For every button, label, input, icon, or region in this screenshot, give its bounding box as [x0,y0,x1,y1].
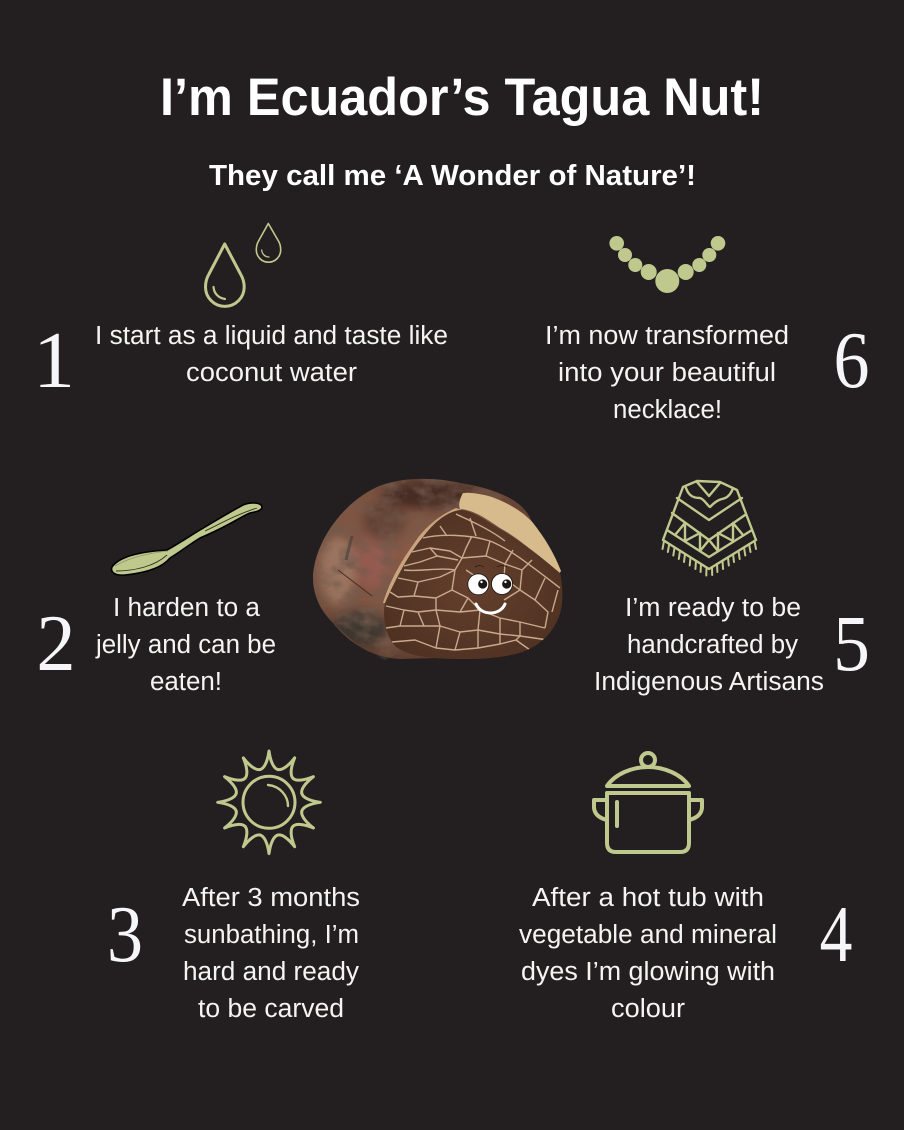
step 1 text [95,322,448,387]
step 3 text: sunbathing, I’m [184,921,359,949]
icon: necklace [609,236,725,293]
step 5 text: I’m ready to be [625,594,801,622]
step 2 text [95,594,276,696]
step 6 text: I’m now transformed [545,322,789,350]
step 6 text [545,322,789,424]
step 2 number: 2 [36,599,76,688]
step 3 text [182,884,360,1023]
step 4 text: colour [611,995,686,1023]
step 5 number: 5 [833,599,870,688]
icon: water drops [206,224,281,306]
step 6 text: necklace! [613,396,722,424]
step 3 text: to be carved [198,995,344,1023]
kernel [384,510,562,659]
step 5 text: Indigenous Artisans [594,668,824,696]
tagua nut illustration [310,475,565,665]
kernel veins [386,514,560,650]
step 4 text [519,884,777,1023]
title: I’m Ecuador’s Tagua Nut! [160,68,764,127]
icon: cooking pot [594,753,702,852]
step 3 text: After 3 months [182,884,360,912]
shell weathering [313,479,532,660]
icon: poncho [662,481,756,576]
kernel rim [383,508,462,603]
cream band [459,493,561,574]
step 4 text: dyes I’m glowing with [521,958,775,986]
step 3 text: hard and ready [183,958,359,986]
step 1 number: 1 [33,316,75,405]
nut shell [313,479,562,659]
step 5 text [594,594,824,696]
step 4 number: 4 [820,890,852,978]
subtitle: They call me ‘A Wonder of Nature’! [209,160,696,192]
step 4 text: vegetable and mineral [519,921,777,949]
step 3 number: 3 [107,891,143,979]
step 2 text: I harden to a [113,594,261,622]
step 1 text: coconut water [186,359,358,387]
step 6 number: 6 [834,317,869,405]
face [468,566,512,613]
step 6 text: into your beautiful [558,359,776,387]
icon: sun [218,751,320,854]
step 1 text: I start as a liquid and taste like [95,322,448,350]
step 2 text: eaten! [150,668,222,696]
step 2 text: jelly and can be [95,631,276,659]
step 5 text: handcrafted by [627,631,798,659]
icon: spoon [112,503,262,575]
step 4 text: After a hot tub with [532,884,764,912]
